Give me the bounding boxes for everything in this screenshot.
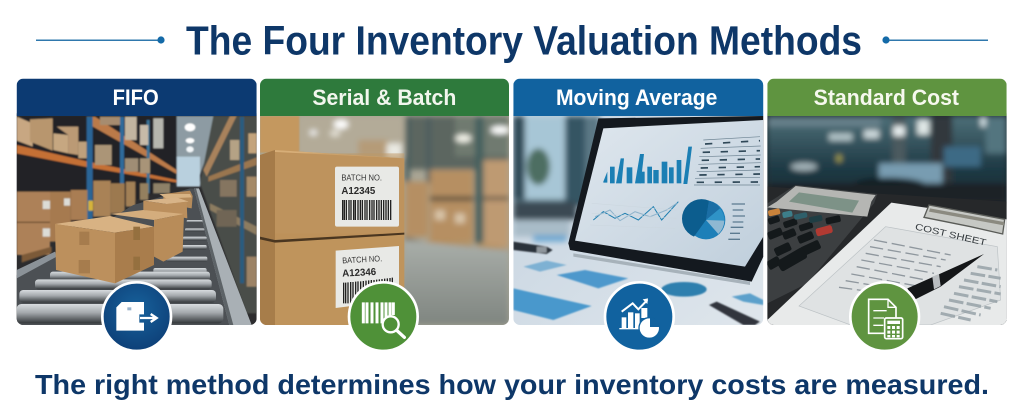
data table [694, 137, 761, 185]
clipboard clip [924, 205, 1005, 234]
label: A12346 [336, 246, 399, 308]
label: A12345: BATCH NO. [341, 173, 382, 183]
label: A12346: A12346 [342, 267, 377, 280]
header: Moving Average [513, 79, 763, 116]
icon: growth chart and pie [605, 282, 674, 351]
panel: FIFO [17, 79, 257, 351]
photo: calculator and cost sheet [766, 113, 1007, 327]
footer tagline: The right method determines how your inventory costs are measured. [35, 369, 989, 400]
pie chart [682, 199, 725, 239]
line chart [593, 201, 679, 226]
header: FIFO [17, 79, 257, 116]
header: Moving Average: Moving Average [556, 85, 717, 110]
label: A12346: BATCH NO. [342, 253, 382, 265]
cost sheet [767, 203, 1007, 325]
pen [907, 254, 984, 300]
photo: labelled boxes [260, 113, 509, 327]
header: FIFO: FIFO [113, 85, 159, 110]
bar chart [603, 147, 692, 184]
header: Serial & Batch [260, 79, 509, 116]
header: Standard Cost [767, 79, 1007, 116]
photo: tablet with charts [513, 113, 763, 327]
calculator [766, 185, 877, 303]
header: Standard Cost: Standard Cost [814, 85, 960, 110]
icon: box moving out [102, 282, 171, 351]
label: A12345 [335, 167, 399, 227]
panel: Serial & Batch [260, 79, 509, 351]
panel: Standard Cost [766, 79, 1007, 351]
panel: Moving Average [513, 79, 763, 351]
header: Serial & Batch: Serial & Batch [312, 85, 456, 110]
label: A12345: A12345 [341, 186, 376, 197]
icon: barcode with magnifier [349, 282, 418, 351]
title: The Four Inventory Valuation Methods [186, 18, 862, 64]
icon: document and calculator [850, 282, 919, 351]
cost sheet: COST SHEET [914, 222, 988, 248]
photo: warehouse conveyor [17, 113, 257, 327]
